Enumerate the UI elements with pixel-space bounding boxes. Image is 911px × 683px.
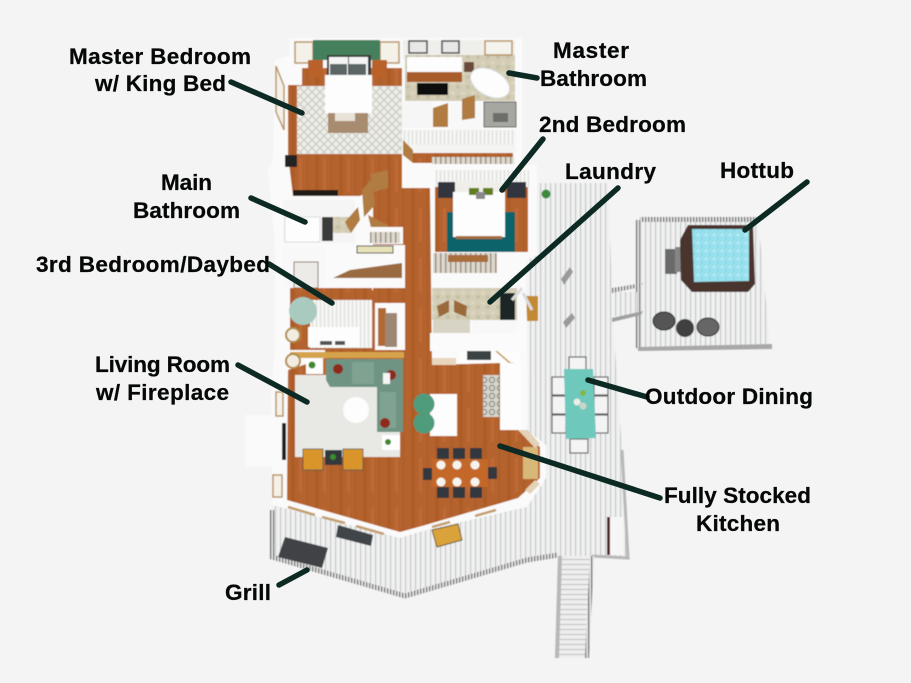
label: fully stocked kitchen: Fully Stocked	[664, 483, 811, 508]
label: master bedroom: Master Bedroom	[69, 44, 251, 69]
stove	[467, 351, 491, 360]
panel: main bathroom	[283, 170, 388, 243]
label: laundry: Laundry	[565, 159, 656, 184]
label: master bathroom: Master	[553, 38, 629, 63]
outdoor dining set	[552, 357, 608, 453]
toilet room	[403, 95, 482, 129]
panel: living room	[273, 352, 404, 497]
side table	[286, 328, 300, 342]
panel: master bathroom	[403, 40, 516, 129]
label: main bathroom: Bathroom	[133, 198, 240, 223]
shower	[484, 102, 516, 127]
feature wall	[313, 40, 380, 60]
tub	[285, 217, 320, 242]
label: main bathroom: Main	[161, 170, 212, 195]
bench	[328, 113, 368, 133]
label: fully stocked kitchen	[664, 483, 811, 536]
master closet	[403, 130, 516, 164]
laundry mat	[525, 296, 538, 321]
label: living room	[95, 352, 230, 405]
dresser	[293, 190, 338, 196]
steps to hot tub	[665, 247, 685, 274]
label: hottub: Hottub	[720, 158, 794, 183]
king bed	[325, 55, 372, 114]
icon: deck plant	[542, 190, 550, 198]
teal rug	[447, 212, 515, 252]
island	[430, 394, 457, 436]
closet	[433, 253, 497, 273]
windows	[276, 42, 399, 130]
mat	[322, 217, 333, 241]
TV	[282, 423, 286, 460]
panel: laundry	[430, 288, 532, 351]
daybed	[308, 327, 360, 347]
runner rug	[483, 375, 499, 417]
hot tub deck	[612, 217, 772, 351]
label: grill: Grill	[225, 580, 271, 605]
deck: main wraparound deck	[272, 183, 628, 596]
main wood floor	[287, 188, 540, 532]
bed	[453, 182, 505, 239]
deck bench	[607, 517, 623, 555]
panel: 2nd bedroom	[433, 168, 533, 273]
label: living room: Living Room	[95, 352, 230, 377]
label: master bathroom	[540, 38, 647, 91]
label: king bed: w/ King Bed	[94, 71, 226, 96]
welcome mat	[432, 524, 462, 547]
patio chairs	[653, 312, 719, 337]
stools	[414, 394, 434, 434]
panel: kitchen	[414, 350, 540, 494]
label: master bathroom: Bathroom	[540, 66, 647, 91]
stool	[464, 62, 474, 72]
round chair	[289, 297, 317, 325]
side table	[382, 435, 400, 450]
deck posts	[561, 267, 575, 328]
floor	[333, 217, 352, 233]
label: living room: w/ Fireplace	[95, 380, 229, 405]
fireplace block	[245, 415, 275, 467]
closet	[375, 303, 405, 350]
panel: 3rd bedroom / daybed	[286, 288, 405, 350]
round lamp table	[286, 354, 300, 368]
nightstands	[438, 182, 457, 198]
bay bench	[518, 430, 540, 494]
nightstands	[308, 60, 323, 77]
grill	[278, 537, 328, 568]
window	[485, 41, 512, 55]
mirrors	[409, 41, 459, 53]
rug	[297, 86, 402, 154]
leader lines	[231, 73, 807, 585]
windows	[273, 392, 283, 497]
fridge counter	[432, 358, 456, 365]
upper left daybed alcove	[283, 247, 325, 288]
washer	[500, 293, 515, 320]
deck bench front	[336, 525, 373, 546]
dining table	[423, 448, 497, 498]
rug	[295, 375, 400, 457]
chair table	[325, 450, 342, 465]
tub	[465, 62, 515, 104]
armchairs	[303, 449, 363, 470]
sectional sofa	[326, 359, 403, 432]
side table	[306, 359, 323, 374]
black mat	[417, 83, 448, 95]
front windows	[288, 507, 496, 534]
coffee table	[343, 397, 369, 423]
deck steps	[612, 283, 643, 322]
label: 3rd bedroom: 3rd Bedroom/Daybed	[36, 252, 270, 277]
label: main bathroom	[133, 170, 240, 223]
panel: master bedroom	[276, 40, 402, 196]
doors	[437, 300, 467, 317]
deck stairs	[555, 556, 594, 658]
step railings	[512, 288, 532, 310]
house shell	[268, 38, 546, 538]
hot tub	[680, 225, 755, 292]
closet	[433, 320, 470, 333]
counter	[458, 350, 520, 363]
black chair	[285, 155, 297, 167]
ledge	[290, 352, 404, 358]
doors	[345, 170, 388, 233]
label: 2nd bedroom: 2nd Bedroom	[539, 112, 686, 137]
label: outdoor dining: Outdoor Dining	[645, 384, 813, 409]
label: fully stocked kitchen: Kitchen	[696, 511, 780, 536]
vanity	[407, 57, 462, 82]
closet and stair block	[325, 227, 405, 288]
side counter	[500, 363, 522, 430]
